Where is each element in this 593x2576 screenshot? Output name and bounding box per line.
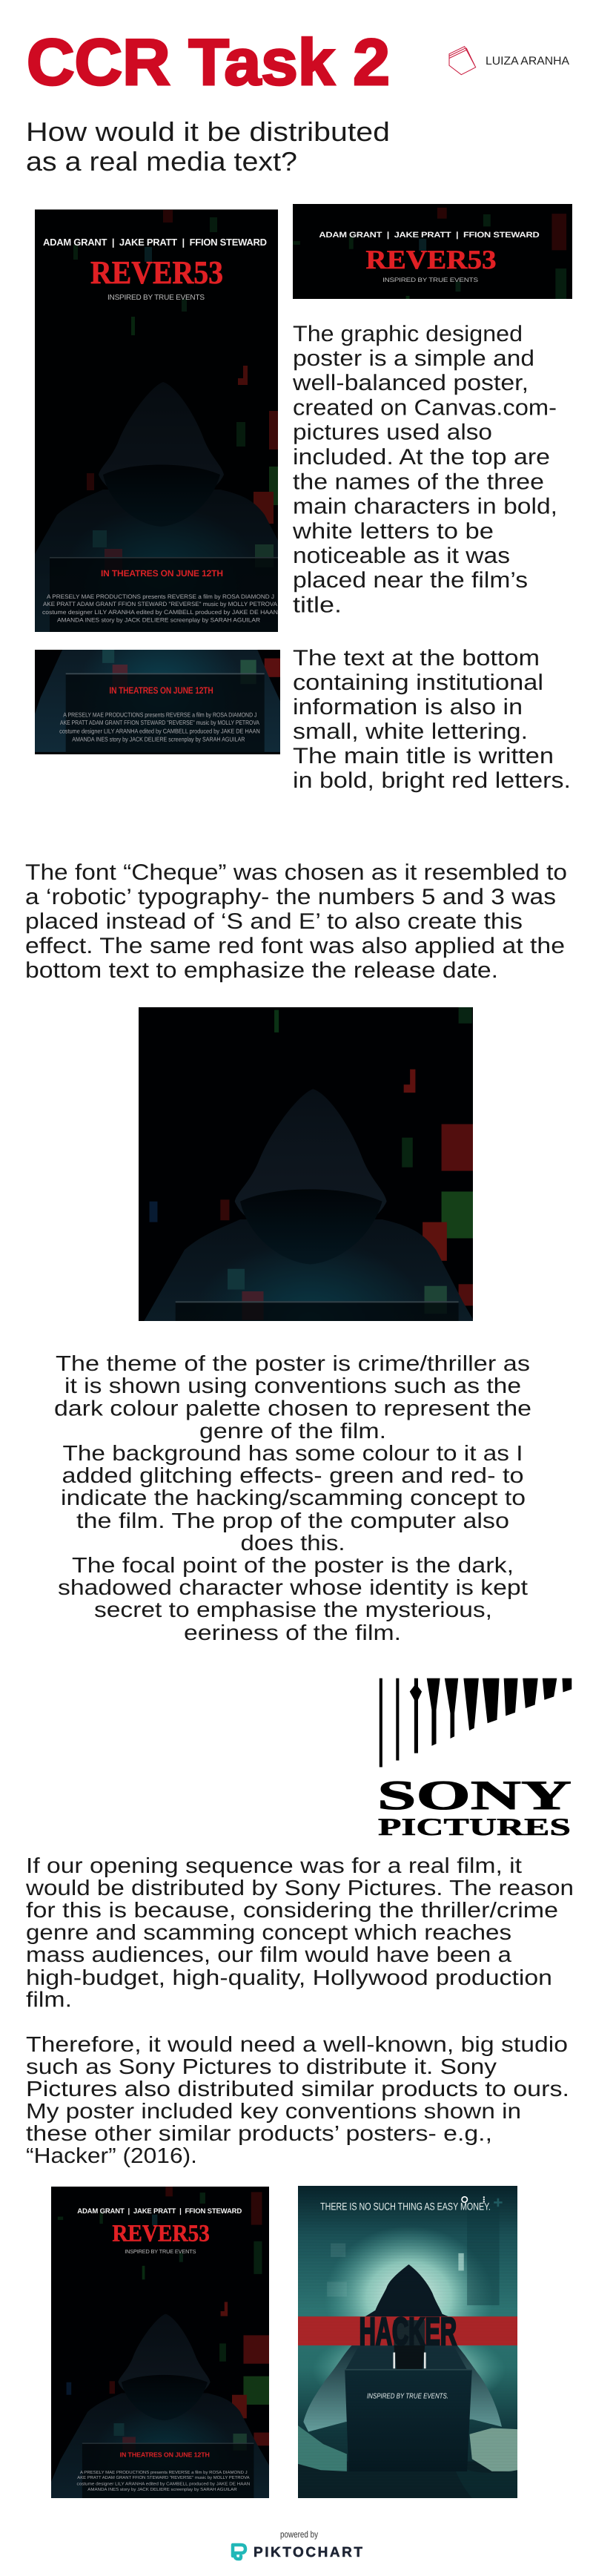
text block: institutional information: small, white lettering. xyxy=(293,719,528,744)
text block: institutional information: containing institutional xyxy=(293,671,543,695)
poster: full Rever53 poster: INSPIRED BY TRUE EVENTS xyxy=(107,294,205,302)
icon: Sony Pictures beam xyxy=(380,1678,572,1767)
text block: font choice: placed instead of ‘S and E’ to also create this xyxy=(25,909,523,934)
poster: full Rever53 poster: IN THEATRES ON JUNE 12TH xyxy=(101,568,223,579)
poster: Rever53 comparison: REVER53 xyxy=(112,2220,210,2247)
poster: Rever53 comparison: AMANDA INES story by JACK DELIERE screenplay by SARAH AGUILAR xyxy=(87,2487,237,2492)
text block: theme of the poster: The background has some colour to it as I xyxy=(62,1442,523,1466)
poster: Rever53 comparison: ADAM GRANT | JAKE PRATT | FFION STEWARD xyxy=(77,2207,242,2215)
text block: distribution by Sony: genre and scamming concept which reaches xyxy=(26,1921,511,1945)
poster: full Rever53 poster: AKE PRATT ADAM GRANT FFION STEWARD "REVERSE" music by MOLLY PETROVA xyxy=(43,601,278,607)
poster: Rever53 comparison: costume designer LILY ARANHA edited by CAMBELL produced by JAKE DE HAAN xyxy=(77,2481,250,2486)
icon: stacked cube xyxy=(449,47,476,75)
text block: font choice: bottom text to emphasize the release date. xyxy=(25,958,498,983)
text block: theme of the poster: shadowed character whose identity is kept xyxy=(58,1576,528,1600)
text block: theme of the poster: it is shown using conventions such as the xyxy=(64,1374,521,1398)
title: CCR Task 2 xyxy=(27,25,390,99)
text block: theme of the poster: secret to emphasise the mysterious, xyxy=(94,1598,492,1622)
text block: institutional information: The text at the bottom xyxy=(293,646,540,671)
text block: poster description: main characters in bold, xyxy=(293,494,557,519)
text block: poster description xyxy=(292,322,557,617)
text block: poster description: poster is a simple and xyxy=(293,346,534,371)
text block: distribution by Sony: high-budget, high-quality, Hollywood production xyxy=(26,1966,552,1990)
logo: Luiza Aranha xyxy=(449,47,570,75)
text block: poster description: well-balanced poster, xyxy=(292,371,529,395)
poster: Rever53 comparison xyxy=(51,2187,269,2498)
text block: theme of the poster: added glitching effects- green and red- to xyxy=(62,1464,523,1488)
subheading xyxy=(26,116,390,177)
poster detail: bottom credits crop xyxy=(35,650,280,754)
icon: Piktochart xyxy=(233,2545,245,2559)
text block: font choice: The font “Cheque” was chosen as it resembled to xyxy=(25,860,567,885)
text block: institutional information: information is also in xyxy=(293,695,523,719)
poster: Hacker (2016): INSPIRED BY TRUE EVENTS. xyxy=(367,2392,448,2400)
text block: poster description: created on Canvas.com- xyxy=(293,396,557,420)
text block: poster description: the names of the three xyxy=(293,470,544,494)
text block: similar products: such as Sony Pictures to distribute it. Sony xyxy=(26,2055,497,2079)
text block: institutional information: in bold, bright red letters. xyxy=(293,768,571,793)
poster detail: bottom credits crop: AKE PRATT ADAM GRANT FFION STEWARD "REVERSE" music by MOLLY PETROVA xyxy=(60,719,259,726)
text block: poster description: included. At the top are xyxy=(293,445,550,470)
text block: theme of the poster: the film. The prop of the computer also xyxy=(76,1509,509,1533)
wordmark: PIKTOCHART xyxy=(254,2545,362,2560)
text block: similar products: Pictures also distributed similar products to ours. xyxy=(26,2078,569,2101)
poster: full Rever53 poster: costume designer LILY ARANHA edited by CAMBELL produced by JAKE DE HAAN xyxy=(42,609,278,616)
text block: similar products: “Hacker” (2016). xyxy=(26,2144,197,2168)
caption: powered by xyxy=(280,2529,319,2540)
text block: poster description: noticeable as it was xyxy=(293,544,510,568)
text block: similar products: these other similar products’ posters- e.g., xyxy=(26,2122,492,2146)
poster: Rever53 comparison: IN THEATRES ON JUNE 12TH xyxy=(120,2451,210,2459)
poster detail: top titles crop: ADAM GRANT | JAKE PRATT | FFION STEWARD xyxy=(319,230,540,240)
text block: poster description: title. xyxy=(293,593,342,617)
text block: theme of the poster xyxy=(54,1352,531,1645)
text block: similar products: My poster included key conventions shown in xyxy=(26,2100,521,2124)
text block: theme of the poster: eeriness of the film. xyxy=(184,1621,401,1645)
text block: theme of the poster: indicate the hacking/scamming concept to xyxy=(61,1486,526,1510)
poster: full Rever53 poster: REVER53 xyxy=(90,254,223,291)
image: hooded figure crop xyxy=(139,1007,473,1321)
text block: poster description: pictures used also xyxy=(293,420,492,445)
poster detail: bottom credits crop: IN THEATRES ON JUNE 12TH xyxy=(109,685,213,696)
text block: poster description: white letters to be xyxy=(292,519,494,544)
logo text: LUIZA ARANHA xyxy=(486,55,570,67)
wordmark: Sony: SONY xyxy=(377,1773,572,1819)
poster detail: top titles crop: INSPIRED BY TRUE EVENTS xyxy=(382,277,478,283)
text block: distribution by Sony: mass audiences, our film would have been a xyxy=(26,1943,512,1967)
text block: font choice: a ‘robotic’ typography- the numbers 5 and 3 was xyxy=(25,885,556,909)
text block: theme of the poster: genre of the film. xyxy=(199,1420,386,1443)
poster: Rever53 comparison: AKE PRATT ADAM GRANT FFION STEWARD "REVERSE" music by MOLLY PETROVA xyxy=(77,2475,250,2480)
wordmark: Pictures: PICTURES xyxy=(378,1814,571,1841)
text block: distribution by Sony xyxy=(25,1854,574,2012)
poster: Hacker (2016) xyxy=(298,2186,517,2498)
text block: poster description: The graphic designed xyxy=(293,322,523,346)
text block: distribution by Sony: film. xyxy=(26,1988,72,2012)
text block: theme of the poster: does this. xyxy=(240,1532,345,1555)
text block: theme of the poster: The focal point of the poster is the dark, xyxy=(72,1554,514,1578)
text block: similar products xyxy=(26,2033,569,2168)
subheading: How would it be distributed xyxy=(26,116,390,147)
footer: powered by Piktochart xyxy=(233,2529,362,2560)
text block: font choice: effect. The same red font was also applied at the xyxy=(25,934,565,958)
text block: distribution by Sony: If our opening sequence was for a real film, it xyxy=(26,1854,522,1878)
poster: full Rever53 poster: ADAM GRANT | JAKE PRATT | FFION STEWARD xyxy=(43,237,267,248)
poster detail: bottom credits crop: A PRESELY MAE PRODUCTIONS presents REVERSE a film by ROSA DIAMOND J xyxy=(63,711,257,719)
poster: full Rever53 poster: AMANDA INES story by JACK DELIERE screenplay by SARAH AGUILAR xyxy=(57,617,260,623)
poster: Rever53 comparison: INSPIRED BY TRUE EVENTS xyxy=(125,2249,196,2255)
poster: full Rever53 poster: A PRESELY MAE PRODUCTIONS presents REVERSE a film by ROSA DIAMOND J xyxy=(47,593,274,600)
logo: Sony Pictures xyxy=(377,1679,572,1841)
poster detail: top titles crop xyxy=(293,204,572,299)
poster detail: bottom credits crop: costume designer LILY ARANHA edited by CAMBELL produced by JAKE DE HAAN xyxy=(59,728,260,735)
poster: Rever53 comparison: A PRESELY MAE PRODUCTIONS presents REVERSE a film by ROSA DIAMOND J xyxy=(80,2470,248,2474)
text block: distribution by Sony: would be distributed by Sony Pictures. The reason xyxy=(25,1877,574,1900)
poster detail: bottom credits crop: AMANDA INES story by JACK DELIERE screenplay by SARAH AGUILAR xyxy=(72,736,245,743)
poster: full Rever53 poster xyxy=(35,209,278,632)
text block: institutional information xyxy=(293,646,571,793)
text block: theme of the poster: dark colour palette chosen to represent the xyxy=(54,1397,531,1421)
text block: similar products: Therefore, it would need a well-known, big studio xyxy=(26,2033,568,2057)
text block: theme of the poster: The theme of the poster is crime/thriller as xyxy=(56,1352,530,1376)
text block: institutional information: The main title is written xyxy=(293,744,554,768)
text block: poster description: placed near the film’s xyxy=(293,568,528,593)
subheading: as a real media text? xyxy=(26,146,297,177)
text block: font choice xyxy=(25,860,567,983)
text block: distribution by Sony: for this is because, considering the thriller/crime xyxy=(26,1899,558,1923)
poster detail: top titles crop: REVER53 xyxy=(365,245,497,274)
